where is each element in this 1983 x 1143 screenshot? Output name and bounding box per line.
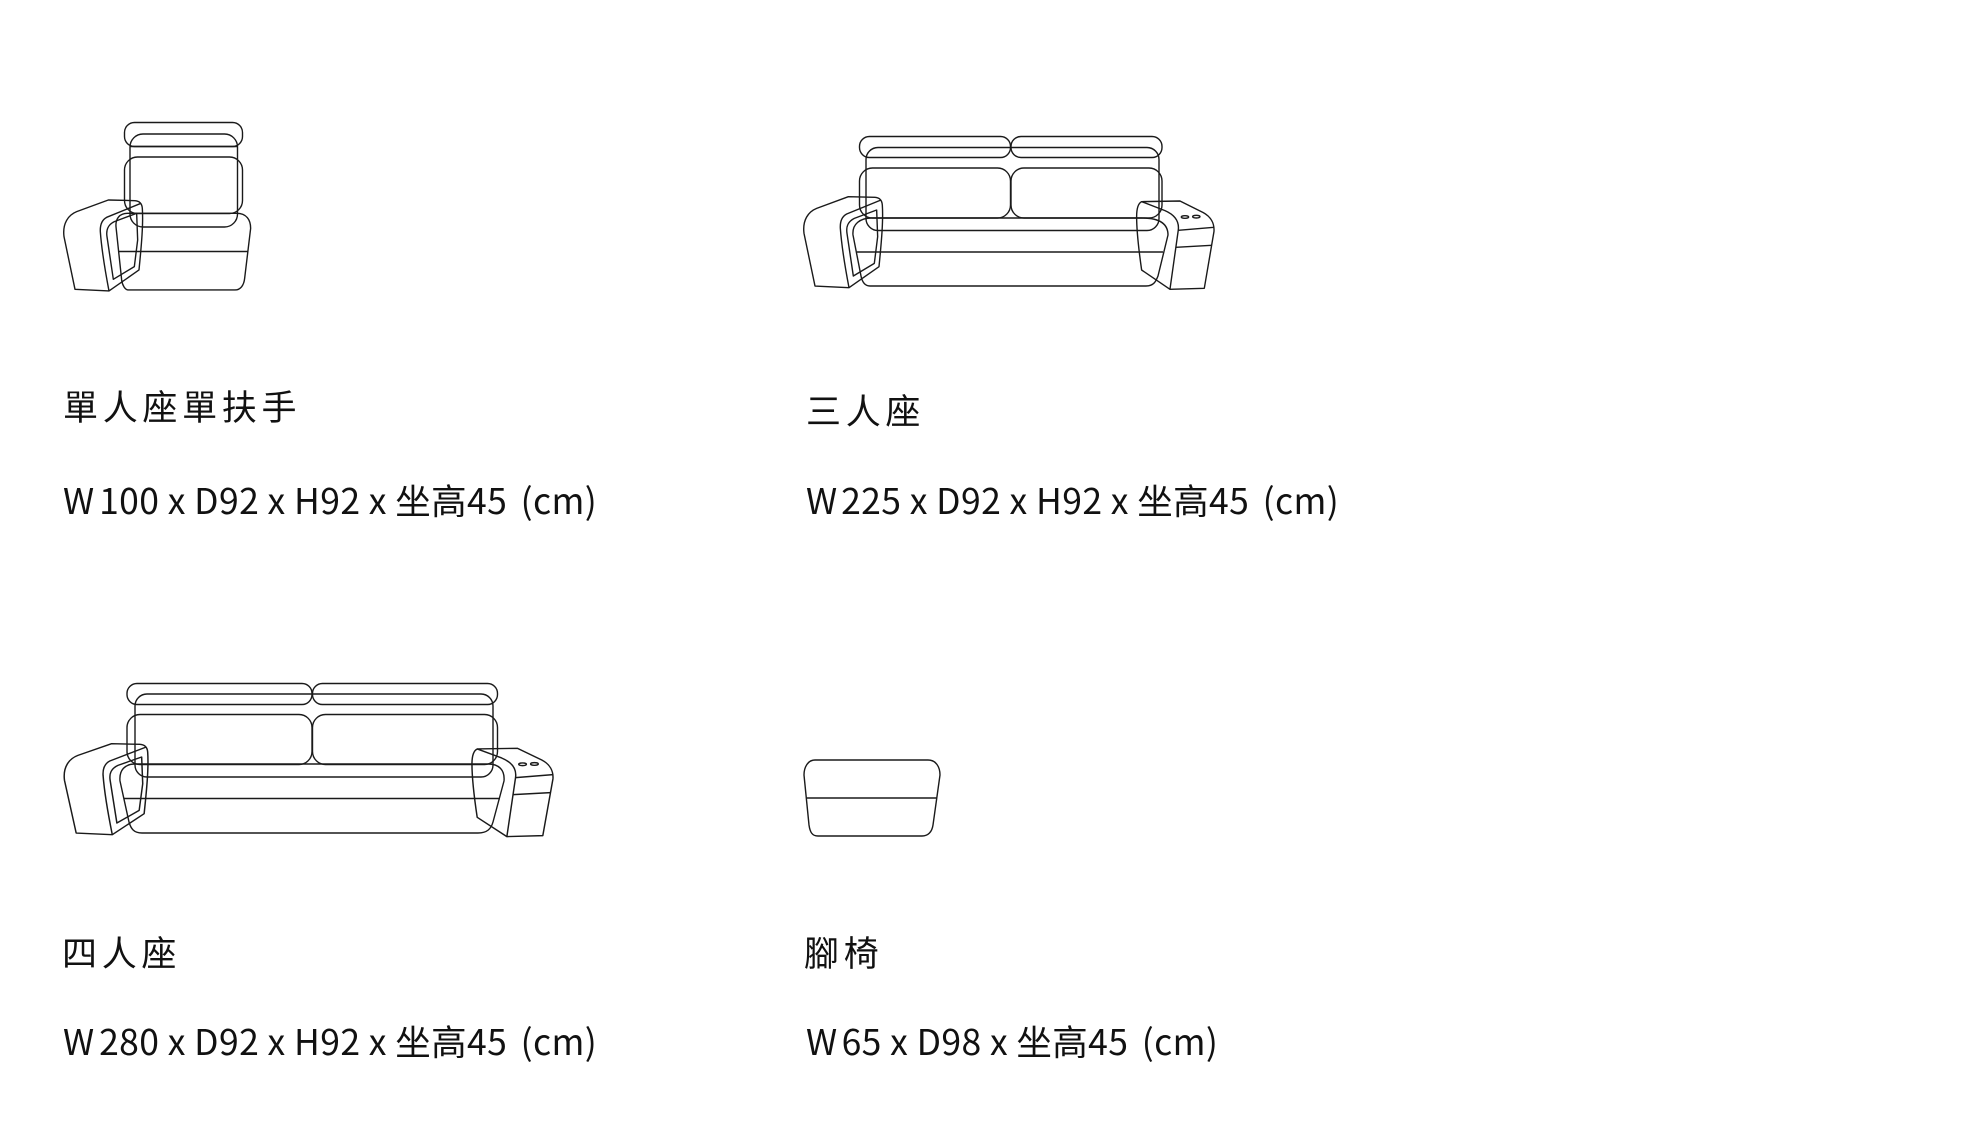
dimensions: single seat: W100 x D92 x H92 x 坐高45 (cm) bbox=[63, 474, 597, 525]
dimensions: ottoman: W65 x D98 x 坐高45 (cm) bbox=[806, 1015, 1218, 1066]
heading: four seat: 四人座 bbox=[62, 926, 181, 977]
heading: three seat: 三人座 bbox=[806, 384, 925, 435]
heading: ottoman: 腳椅 bbox=[804, 926, 883, 977]
dimensions: three seat: W225 x D92 x H92 x 坐高45 (cm) bbox=[806, 474, 1339, 525]
panel: single seat with one armrest bbox=[63, 122, 597, 525]
heading: single seat: 單人座單扶手 bbox=[63, 380, 301, 431]
icon: three seat sofa line drawing bbox=[804, 136, 1214, 289]
icon: single seat sofa line drawing bbox=[64, 122, 251, 291]
dimensions: four seat: W280 x D92 x H92 x 坐高45 (cm) bbox=[63, 1015, 597, 1066]
icon: ottoman line drawing bbox=[804, 760, 940, 836]
panel: ottoman bbox=[804, 760, 1218, 1066]
icon: four seat sofa line drawing bbox=[64, 684, 553, 837]
panel: four seat bbox=[62, 684, 597, 1066]
panel: three seat bbox=[804, 136, 1339, 525]
